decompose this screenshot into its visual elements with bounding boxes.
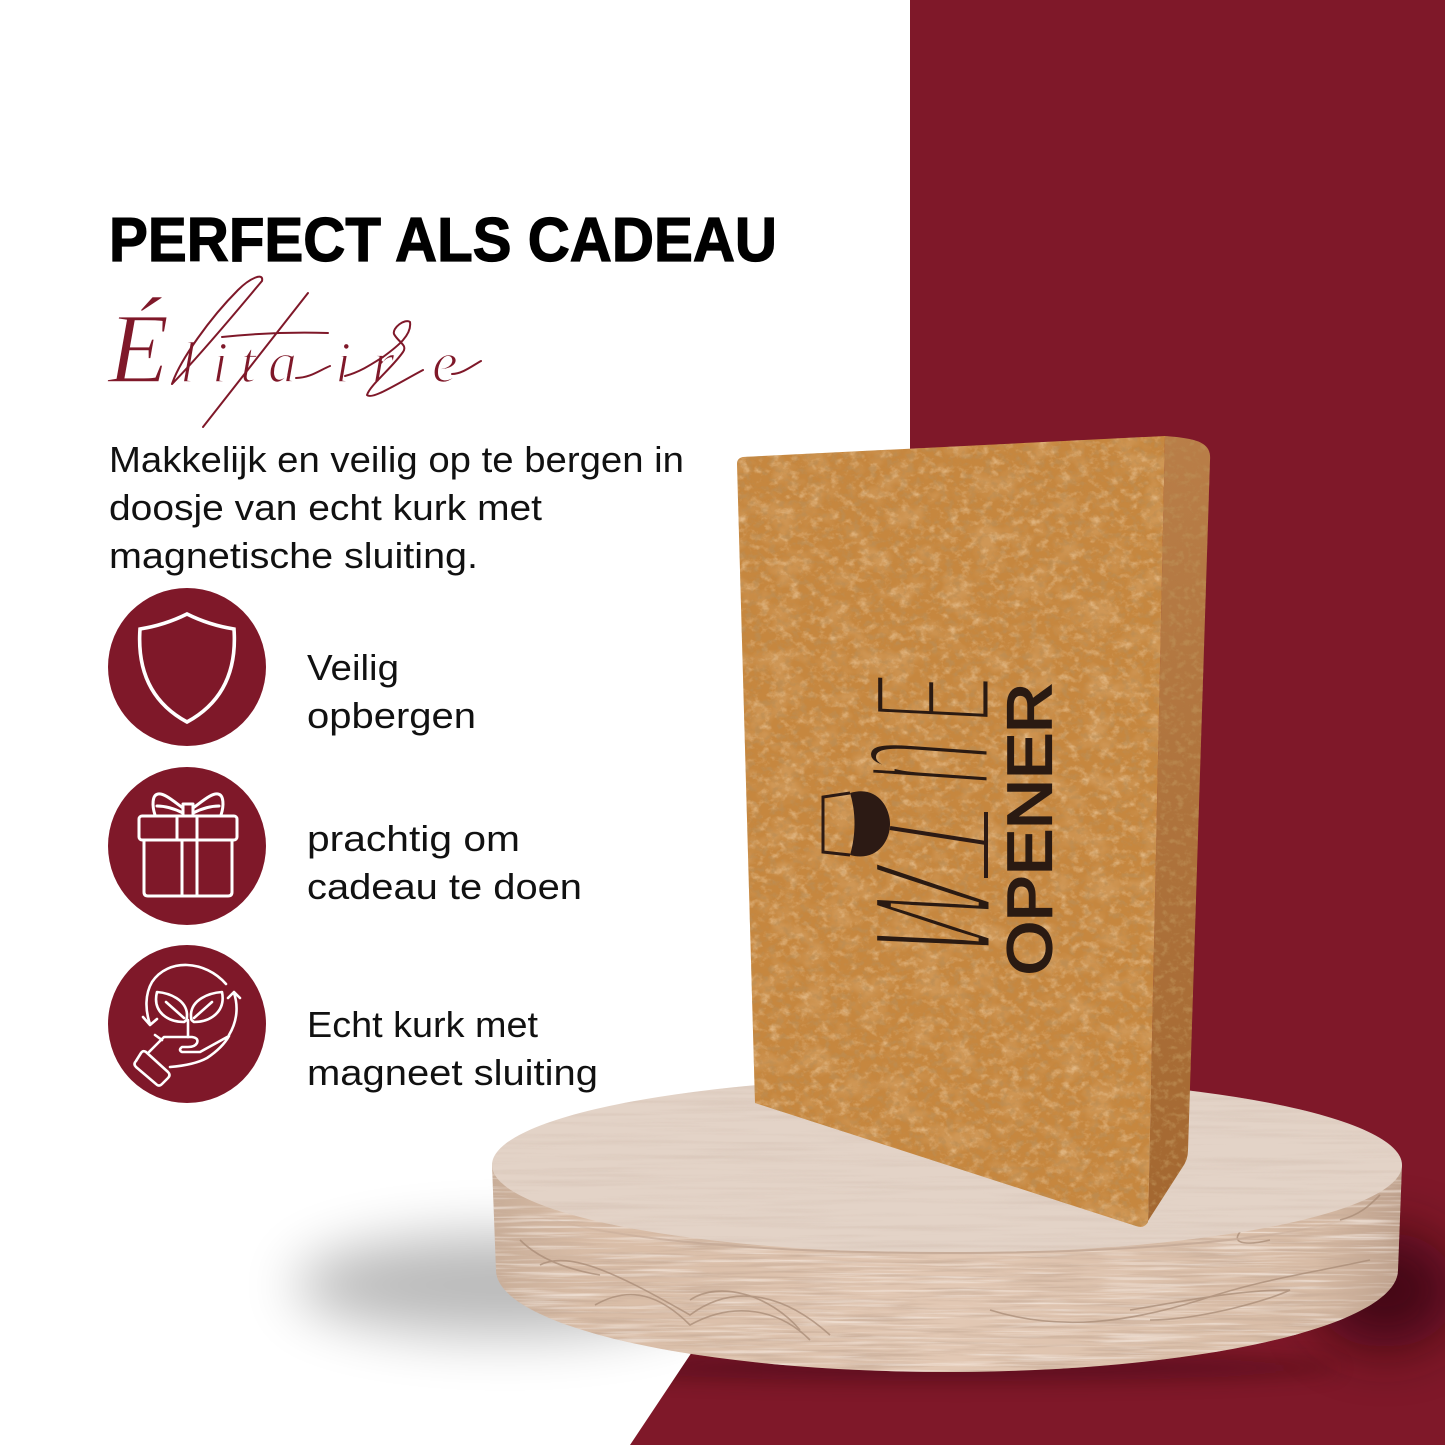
intro paragraph [109, 439, 684, 576]
icon: gift [108, 767, 266, 925]
feature text: prachtig om cadeau te doen: cadeau te doen [307, 866, 582, 907]
box side face [1148, 436, 1210, 1222]
feature text: veilig opbergen: Veilig [307, 647, 399, 688]
podium top [490, 1076, 1405, 1256]
feature text: echt kurk met magneet sluiting: Echt kurk met [307, 1004, 538, 1045]
title: PERFECT ALS CADEAU [109, 206, 777, 275]
feature text: prachtig om cadeau te doen [307, 818, 582, 907]
feature text: veilig opbergen: opbergen [307, 695, 476, 736]
box front face [730, 430, 1170, 1230]
cork box [730, 430, 1220, 1230]
logo: OPENER: OPENER [996, 683, 1065, 975]
background: red panel [630, 0, 1445, 1445]
intro paragraph: doosje van echt kurk met [109, 487, 542, 528]
feature text: echt kurk met magneet sluiting [307, 1004, 598, 1093]
icon: plant in hand [108, 945, 266, 1103]
feature text: veilig opbergen [307, 647, 476, 736]
feature text: prachtig om cadeau te doen: prachtig om [307, 818, 520, 859]
script brand name: litaire [180, 330, 458, 395]
disc shadow on red [580, 1232, 1445, 1381]
intro paragraph: Makkelijk en veilig op te bergen in [109, 439, 684, 480]
script brand name [106, 277, 481, 427]
logo: WINE [871, 678, 989, 946]
podium rim [530, 1212, 1368, 1253]
feature text: echt kurk met magneet sluiting: magneet sluiting [307, 1052, 598, 1093]
script brand name: É [106, 293, 169, 404]
logo: wine glass [823, 791, 986, 878]
podium side [490, 1160, 1405, 1375]
wooden podium [490, 1076, 1405, 1375]
icon: shield [108, 588, 266, 746]
disc shadow on white [295, 1235, 715, 1335]
intro paragraph: magnetische sluiting. [109, 535, 478, 576]
